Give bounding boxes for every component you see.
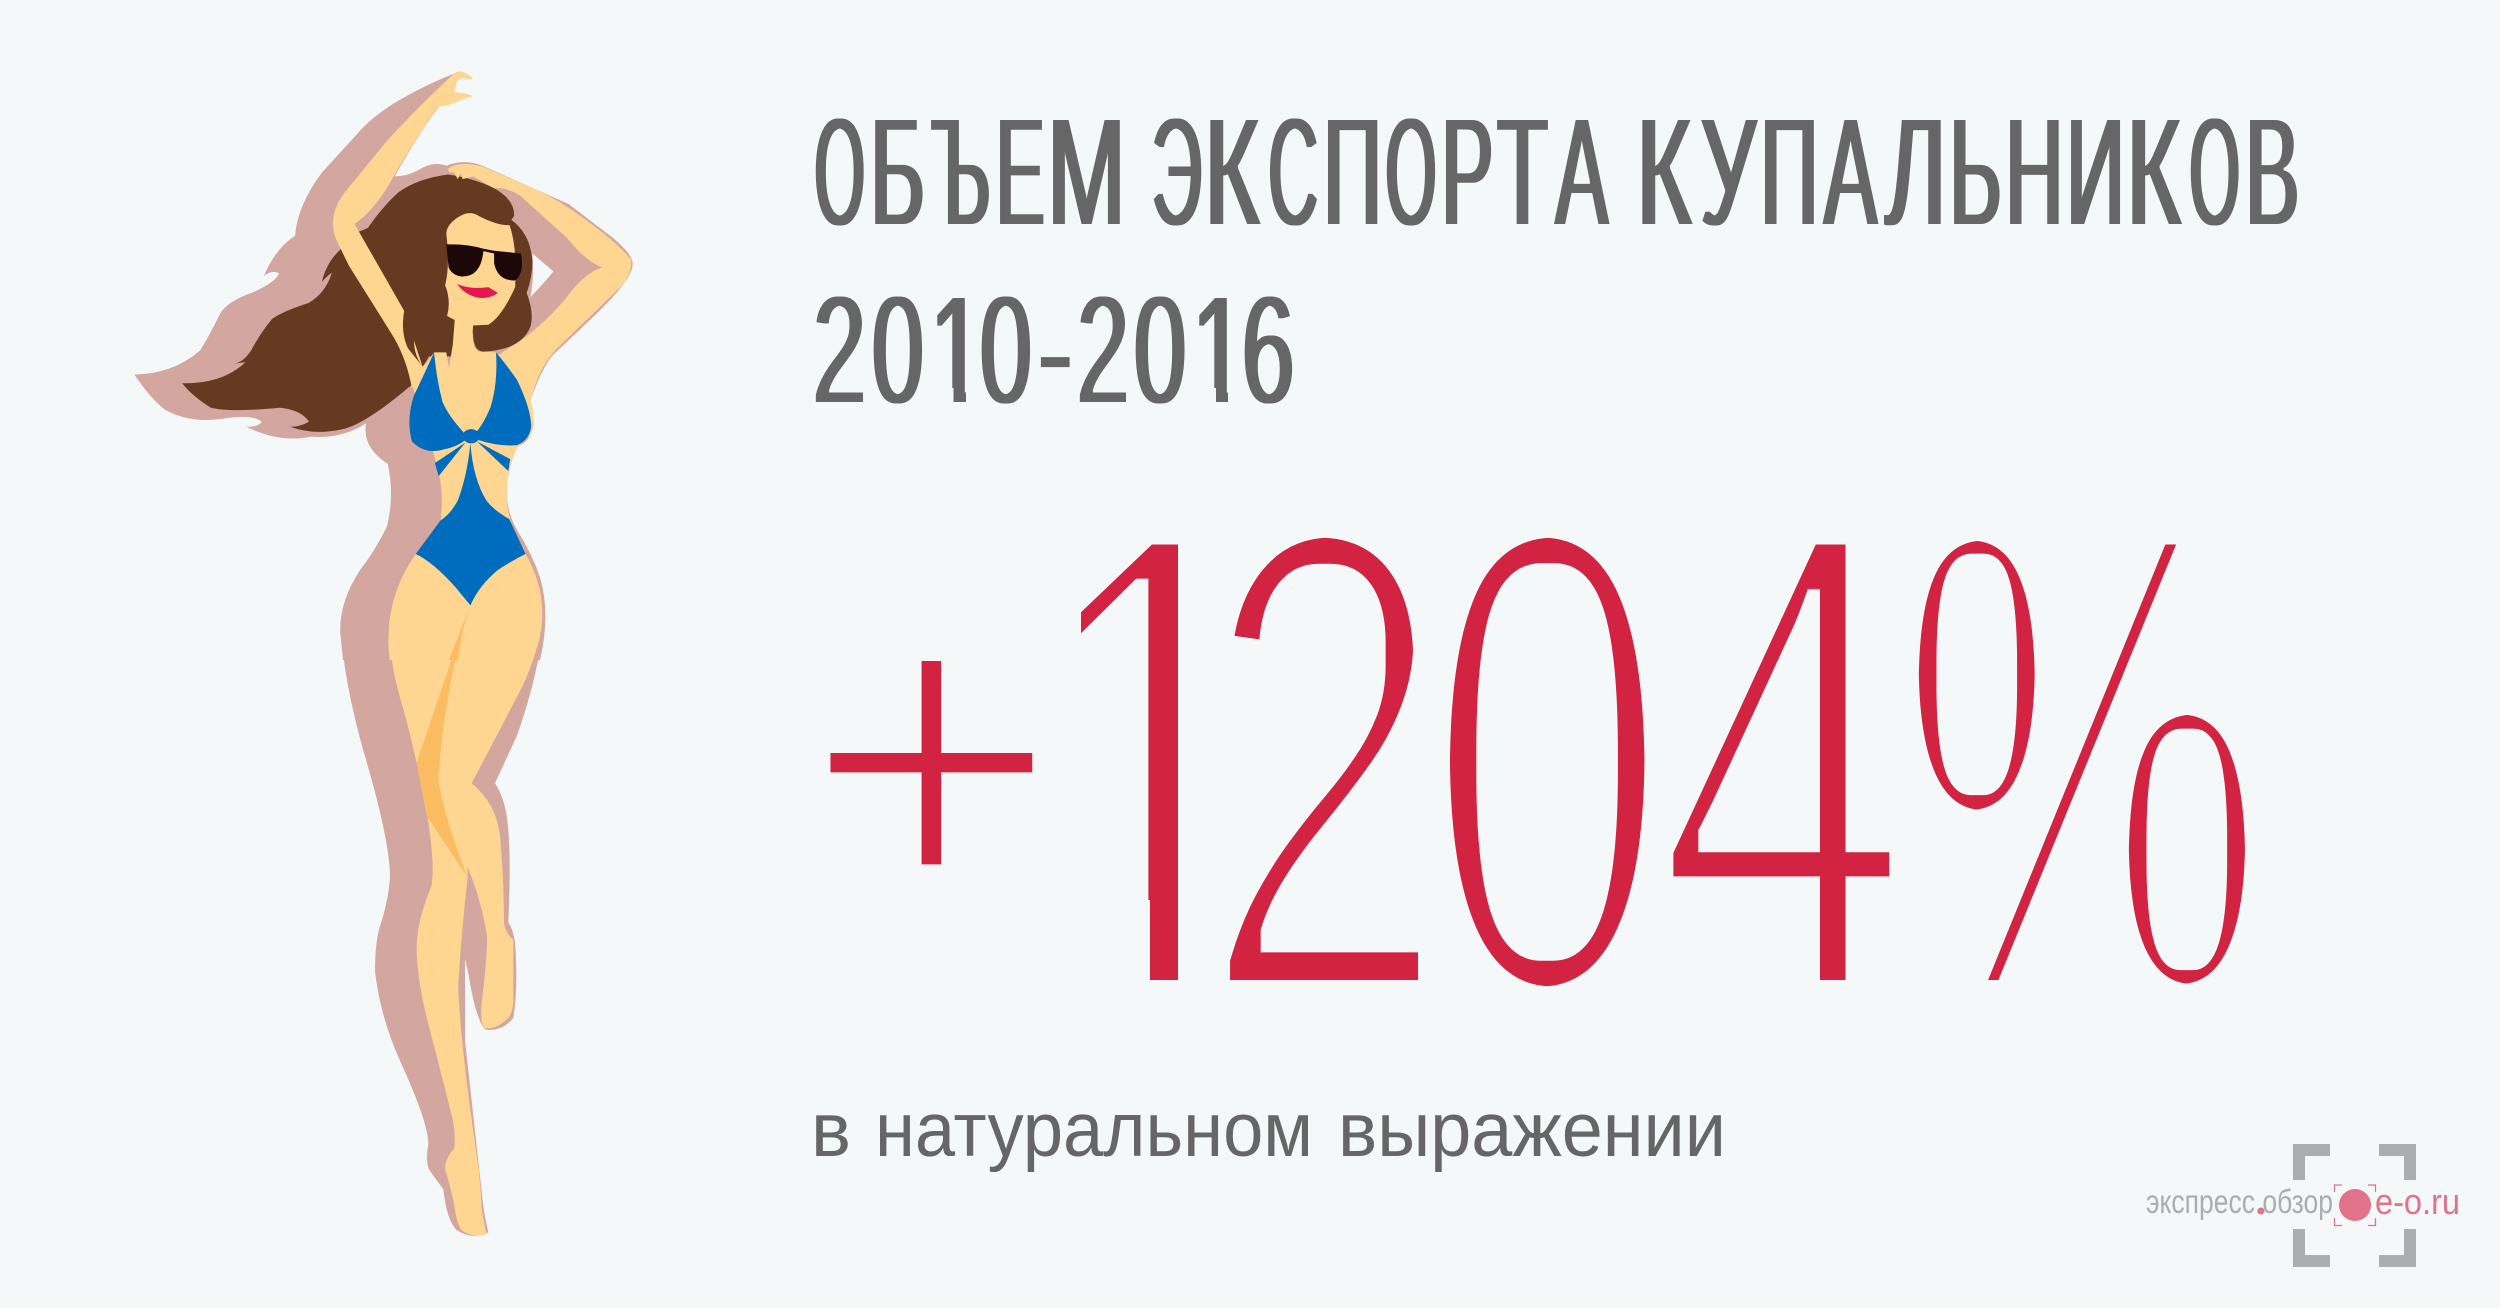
title: Т [1497, 86, 1548, 258]
title: А [1824, 86, 1877, 258]
title: А [1555, 86, 1608, 258]
big number: +1204%: 2 [1202, 390, 1446, 1133]
logo: domain: e-o.ru [2375, 1181, 2460, 1222]
title: Р [1442, 86, 1493, 258]
skin: legs [389, 620, 542, 1236]
title [813, 86, 2299, 436]
title: О [2190, 86, 2240, 258]
sunglasses [446, 244, 522, 280]
title: 0 [980, 264, 1032, 436]
thigh shading [417, 605, 470, 877]
title: 1 [930, 264, 984, 436]
shadow: upper body and hair [134, 74, 633, 660]
subtitle: выражении [1338, 1087, 1726, 1173]
title: Л [1885, 86, 1946, 258]
swimsuit: right cup [477, 352, 531, 445]
title: И [2066, 86, 2125, 258]
title: П [1760, 86, 1818, 258]
logo: dot [2258, 1208, 2264, 1214]
subtitle: натуральном [875, 1087, 1313, 1173]
logo: e-o.ru [2146, 1144, 2460, 1267]
title: К [2127, 86, 2182, 258]
subtitle: в [811, 1087, 851, 1173]
title: О [1386, 86, 1436, 258]
title: Б [870, 86, 925, 258]
title: М [1047, 86, 1126, 258]
big number: +1204%: 1 [1022, 388, 1288, 1132]
logo: gray corner brackets [2293, 1144, 2416, 1267]
swimsuit [409, 352, 531, 605]
face details [446, 244, 522, 298]
title: В [2245, 86, 2299, 258]
swimsuit: left cup [409, 352, 465, 451]
lips [457, 284, 498, 298]
title: К [1204, 86, 1260, 258]
title: С [1268, 86, 1318, 258]
big number: +1204% [803, 388, 2266, 1133]
big number: +1204%: 0 [1427, 389, 1667, 1132]
swimsuit: lower part [416, 443, 526, 605]
big number: +1204%: 4 [1657, 389, 1909, 1133]
swimsuit: knot [463, 429, 480, 443]
skin: face and torso [388, 213, 542, 660]
logo: text: экспресс.обзор [2146, 1183, 2333, 1220]
big number: +1204%: % [1898, 391, 2266, 1133]
hair: flowing back [182, 174, 532, 432]
subtitle [811, 1087, 1726, 1173]
title: 0 [1134, 264, 1186, 436]
swimsuit: side bands [435, 441, 510, 476]
big number: +1204%: + [803, 512, 1060, 1003]
skin: raised arms [333, 71, 631, 400]
hair: strand over arm [403, 311, 433, 367]
title: Е [996, 86, 1044, 258]
title: Н [2006, 86, 2063, 258]
title: О [815, 86, 865, 258]
logo: pink circle [2339, 1189, 2371, 1221]
title: У [1700, 86, 1757, 258]
title: 0 [872, 264, 924, 436]
title: П [1323, 86, 1382, 258]
title: 2 [1077, 264, 1129, 436]
shadow: lower legs [341, 620, 545, 1236]
title: Ь [1950, 86, 2002, 258]
title: Э [1152, 86, 1202, 258]
title: - [1038, 264, 1072, 436]
title: 1 [1192, 264, 1246, 436]
illustration: woman in blue swimsuit with shadow [134, 71, 633, 1236]
title: 6 [1242, 264, 1294, 436]
title: К [1636, 86, 1692, 258]
title: 2 [813, 264, 866, 436]
logo: pink viewfinder [2334, 1185, 2376, 1226]
title: Ъ [931, 86, 991, 258]
